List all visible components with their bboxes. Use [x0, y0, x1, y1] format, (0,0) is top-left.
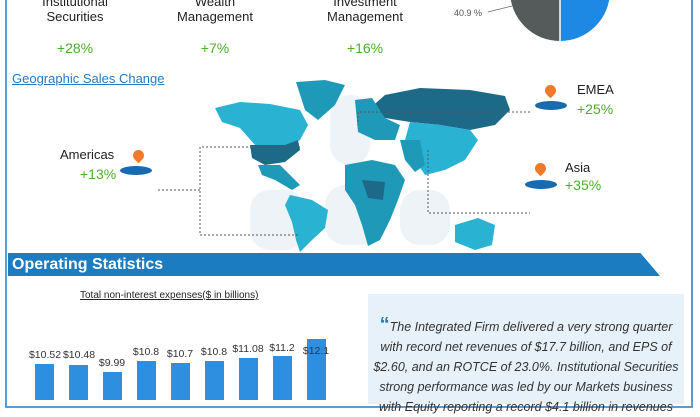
segment: wealth management: Management — [177, 9, 253, 24]
quote box — [368, 294, 684, 404]
quote box: strong performance was led by our Markets business — [379, 380, 673, 394]
segment: wealth management: +7% — [201, 40, 229, 56]
pie chart: 40.9 % — [454, 8, 482, 18]
segment: institutional securities: Securities — [46, 9, 104, 24]
callout: americas — [60, 147, 152, 182]
bar chart — [29, 339, 329, 400]
bar chart: $12.1 — [303, 345, 329, 357]
bar chart: $10.48 — [63, 349, 95, 361]
world map — [215, 80, 510, 252]
bar chart: $10.8 — [133, 346, 159, 358]
bar chart: $10.7 — [167, 348, 193, 360]
callout: emea — [535, 82, 614, 117]
segment: investment management: Management — [327, 9, 403, 24]
segment: institutional securities — [42, 0, 108, 56]
bar chart: $10.52 — [29, 349, 61, 361]
callout: asia — [525, 160, 601, 193]
bar chart: $9.99 — [99, 357, 125, 369]
callout: asia: Asia — [565, 160, 590, 175]
bar chart: $10.8 — [201, 346, 227, 358]
segment: wealth management — [177, 0, 253, 56]
quote box: with record net revenues of $17.7 billion, and EPS of — [380, 340, 672, 354]
callout: americas: +13% — [80, 166, 116, 182]
segment: investment management — [327, 0, 403, 56]
callout: emea: EMEA — [577, 82, 614, 97]
text: with Equity reporting a record $4.1 billion in revenues — [379, 400, 673, 414]
callout: asia: +35% — [565, 177, 601, 193]
quote box: $2.60, and an ROTCE of 23.0%. Institutional Securities — [373, 360, 679, 374]
chart title: Total non-interest expenses($ in billions) — [80, 290, 258, 301]
heading: geographic sales change: Geographic Sales Change — [12, 71, 164, 86]
callout lines — [158, 112, 530, 236]
banner: operating statistics — [8, 253, 660, 276]
callout: emea: +25% — [577, 101, 613, 117]
callout: americas: Americas — [60, 147, 114, 162]
segment: institutional securities: +28% — [57, 40, 93, 56]
banner: operating statistics: Operating Statistics — [12, 256, 163, 273]
pie chart — [454, 0, 610, 41]
bar chart: $11.08 — [232, 343, 264, 355]
bar chart: $11.2 — [269, 342, 295, 354]
segment: investment management: +16% — [347, 40, 383, 56]
quote box: “The Integrated Firm delivered a very strong quarter — [380, 314, 672, 336]
